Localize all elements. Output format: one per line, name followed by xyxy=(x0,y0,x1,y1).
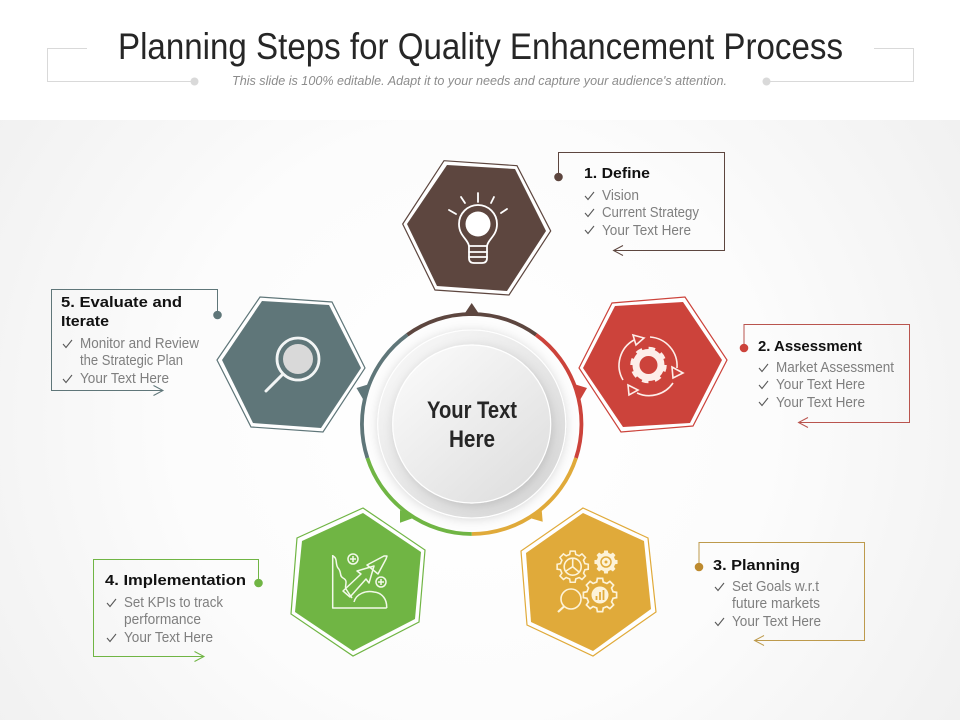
callout frame xyxy=(52,290,221,396)
checklist xyxy=(63,336,199,387)
checklist: Your Text Here xyxy=(602,223,691,239)
checklist: Your Text Here xyxy=(124,630,213,646)
icon: gear with cycle arrows xyxy=(619,335,683,396)
callout frame xyxy=(94,560,262,662)
hexagon 1: define xyxy=(403,161,551,295)
inner disc xyxy=(393,345,551,503)
callout frame xyxy=(740,324,910,428)
callout frame xyxy=(555,152,724,256)
checklist: Your Text Here xyxy=(776,395,865,411)
checklist: performance xyxy=(124,612,201,628)
heading: 5. Evaluate and xyxy=(61,294,182,311)
callout frame xyxy=(695,542,864,646)
checklist: Monitor and Review xyxy=(80,336,199,352)
right title bracket xyxy=(762,48,914,86)
checklist: Your Text Here xyxy=(776,377,865,393)
outer soft disc xyxy=(364,316,580,532)
header xyxy=(48,26,914,88)
checklist: future markets xyxy=(732,596,820,612)
left title bracket xyxy=(48,48,198,86)
checklist xyxy=(715,579,821,630)
hexagon 4: implementation xyxy=(291,508,425,656)
ring pointers xyxy=(356,303,587,523)
checklist xyxy=(585,188,700,239)
hexagon 5: evaluate xyxy=(217,297,365,432)
center text xyxy=(427,397,517,453)
checklist: Your Text Here xyxy=(80,371,169,387)
center text: Your Text xyxy=(427,397,517,424)
icon: gears and magnifier xyxy=(557,550,618,612)
central circle diagram xyxy=(356,303,587,534)
heading xyxy=(61,294,182,330)
hexagon 3: planning xyxy=(521,508,656,656)
checklist: the Strategic Plan xyxy=(80,353,183,369)
callout 5: evaluate and iterate xyxy=(52,290,221,396)
heading: 3. Planning xyxy=(713,557,800,574)
subtitle: This slide is 100% editable. Adapt it to your needs and capture your audience's attention. xyxy=(232,74,727,88)
checklist: Market Assessment xyxy=(776,360,894,376)
callout 2: assessment xyxy=(740,324,910,428)
segmented ring xyxy=(362,314,581,534)
icon: magnifier xyxy=(266,338,319,391)
callout 4: implementation xyxy=(94,560,262,662)
center text: Here xyxy=(449,426,495,453)
heading: 1. Define xyxy=(584,165,650,182)
callout 3: planning xyxy=(695,542,864,646)
callout 1: define xyxy=(555,152,724,256)
checklist xyxy=(107,595,224,646)
icon: light bulb xyxy=(449,193,507,263)
icon: rocket growth chart xyxy=(333,554,387,608)
checklist: Current Strategy xyxy=(602,205,700,221)
heading: 2. Assessment xyxy=(758,338,862,355)
heading: 4. Implementation xyxy=(105,572,246,589)
title: Planning Steps for Quality Enhancement Process xyxy=(118,26,843,67)
middle disc xyxy=(378,330,566,518)
checklist: Set KPIs to track xyxy=(124,595,224,611)
checklist: Set Goals w.r.t xyxy=(732,579,819,595)
hexagon 2: assessment xyxy=(579,297,727,432)
heading: Iterate xyxy=(61,313,109,330)
checklist: Your Text Here xyxy=(732,614,821,630)
checklist xyxy=(759,360,894,411)
checklist: Vision xyxy=(602,188,639,204)
